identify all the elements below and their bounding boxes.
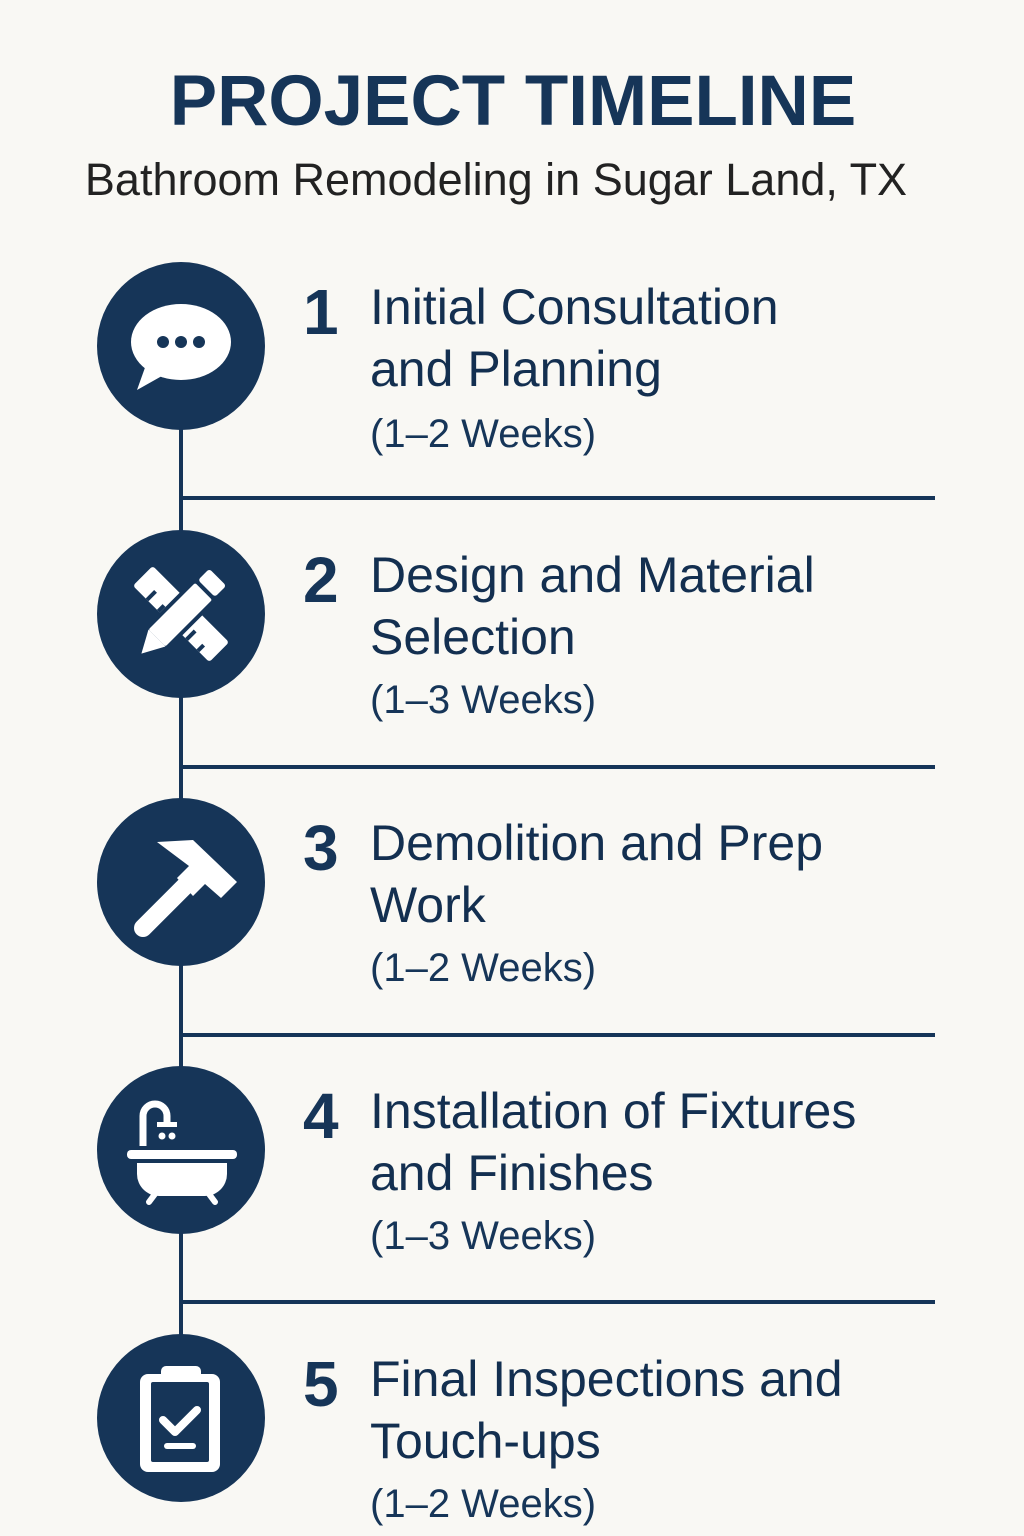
step title bbox=[370, 279, 779, 397]
step title: Design and Material bbox=[370, 547, 815, 603]
step title: Work bbox=[370, 877, 486, 933]
step title bbox=[370, 1083, 856, 1201]
step title: Demolition and Prep bbox=[370, 815, 823, 871]
icon: hammer bbox=[97, 798, 265, 966]
duration: (1–3 Weeks) bbox=[370, 1214, 596, 1258]
step title: Final Inspections and bbox=[370, 1351, 843, 1407]
step 4 bbox=[97, 1066, 856, 1258]
icon: pencil and ruler bbox=[97, 530, 265, 698]
timeline vertical line bbox=[179, 346, 183, 1418]
step 5 bbox=[97, 1334, 843, 1526]
step 3 bbox=[97, 798, 823, 990]
step title: and Planning bbox=[370, 341, 662, 397]
step title bbox=[370, 815, 823, 933]
step title: Installation of Fixtures bbox=[370, 1083, 856, 1139]
step number: 2 bbox=[303, 544, 339, 616]
duration: (1–2 Weeks) bbox=[370, 946, 596, 990]
duration: (1–3 Weeks) bbox=[370, 678, 596, 722]
icon: chat bubble bbox=[97, 262, 265, 430]
duration: (1–2 Weeks) bbox=[370, 412, 596, 456]
step title bbox=[370, 1351, 843, 1469]
step title bbox=[370, 547, 815, 665]
duration: (1–2 Weeks) bbox=[370, 1482, 596, 1526]
step title: Initial Consultation bbox=[370, 279, 779, 335]
title: PROJECT TIMELINE bbox=[170, 62, 856, 141]
step title: Selection bbox=[370, 609, 576, 665]
step number: 5 bbox=[303, 1348, 339, 1420]
subtitle: Bathroom Remodeling in Sugar Land, TX bbox=[85, 154, 907, 205]
step number: 3 bbox=[303, 812, 339, 884]
step title: Touch-ups bbox=[370, 1413, 601, 1469]
step title: and Finishes bbox=[370, 1145, 654, 1201]
step 2 bbox=[97, 530, 815, 722]
step 1 bbox=[97, 262, 779, 456]
icon: bathtub bbox=[97, 1066, 265, 1234]
step number: 4 bbox=[303, 1080, 339, 1152]
step number: 1 bbox=[303, 276, 339, 348]
icon: clipboard check bbox=[97, 1334, 265, 1502]
